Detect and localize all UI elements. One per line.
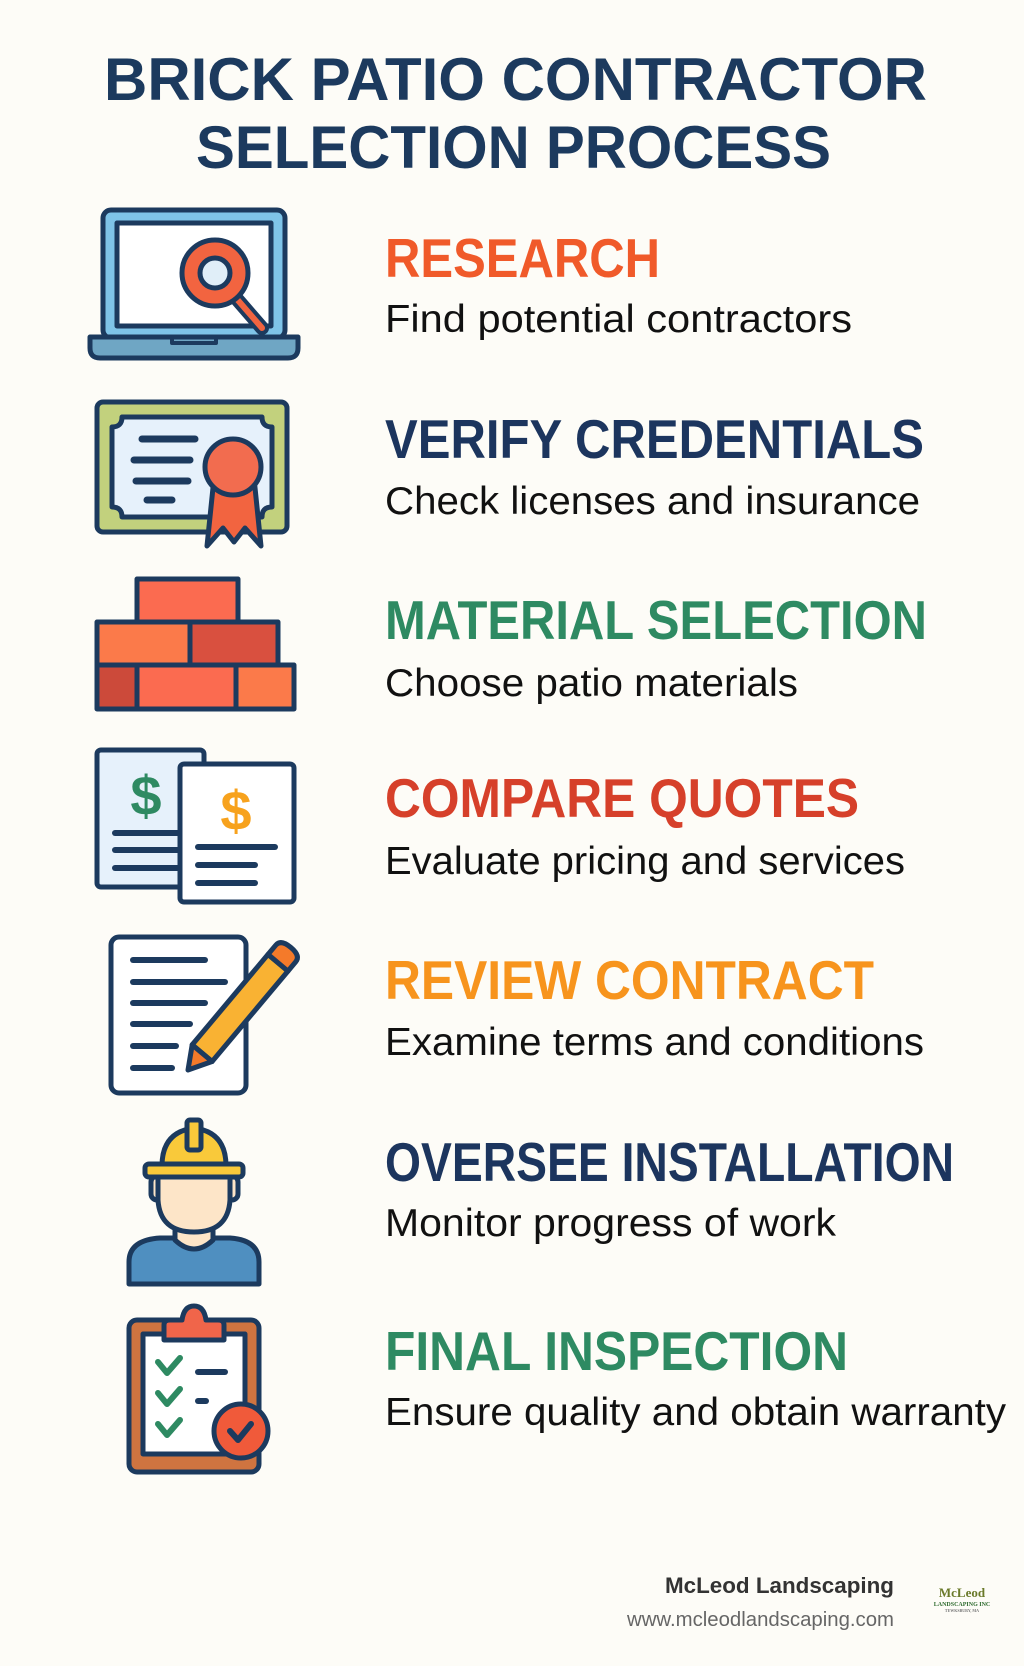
heading: final inspection: FINAL INSPECTION — [385, 1320, 848, 1382]
icon: quotes: $ — [220, 779, 252, 842]
icon: clipboard — [129, 1306, 268, 1472]
heading: compare quotes — [385, 767, 905, 883]
heading: review contract — [385, 949, 924, 1064]
title — [104, 46, 927, 181]
heading: oversee installation: Monitor progress of work — [385, 1202, 837, 1245]
icon: quotes: $ — [130, 764, 162, 827]
icon: bricks — [97, 579, 294, 709]
heading: verify credentials: Check licenses and insurance — [385, 480, 920, 523]
footer logo: TEWKSBURY, MA — [945, 1608, 979, 1613]
icon: contract with pencil — [111, 937, 301, 1093]
heading: material selection: Choose patio materials — [385, 662, 798, 705]
footer: company name and url — [626, 1573, 894, 1631]
heading: research — [385, 227, 852, 341]
heading: final inspection — [385, 1320, 1007, 1434]
heading: review contract: Examine terms and conditions — [385, 1021, 924, 1064]
footer logo — [934, 1585, 990, 1613]
footer: company name and url: www.mcleodlandscaping.com — [626, 1609, 894, 1631]
footer logo: LANDSCAPING INC — [934, 1602, 990, 1608]
heading: material selection: MATERIAL SELECTION — [385, 589, 927, 651]
heading: compare quotes: Evaluate pricing and services — [385, 840, 905, 883]
heading: oversee installation — [385, 1131, 954, 1245]
icon: laptop with magnifier — [90, 210, 298, 358]
title: SELECTION PROCESS — [196, 114, 831, 181]
heading: research: Find potential contractors — [385, 298, 852, 341]
heading: research: RESEARCH — [385, 227, 660, 289]
heading: verify credentials — [385, 408, 924, 523]
icon: quotes — [97, 750, 294, 902]
heading: material selection — [385, 589, 927, 705]
footer: company name and url: McLeod Landscaping — [665, 1573, 894, 1598]
icon: worker — [129, 1120, 259, 1284]
heading: review contract: REVIEW CONTRACT — [385, 949, 874, 1011]
icon: certificate — [97, 402, 287, 546]
title: BRICK PATIO CONTRACTOR — [104, 46, 927, 113]
heading: compare quotes: COMPARE QUOTES — [385, 767, 859, 829]
footer logo: McLeod — [939, 1585, 986, 1600]
heading: final inspection: Ensure quality and obtain warranty — [385, 1391, 1007, 1434]
heading: verify credentials: VERIFY CREDENTIALS — [385, 408, 924, 470]
